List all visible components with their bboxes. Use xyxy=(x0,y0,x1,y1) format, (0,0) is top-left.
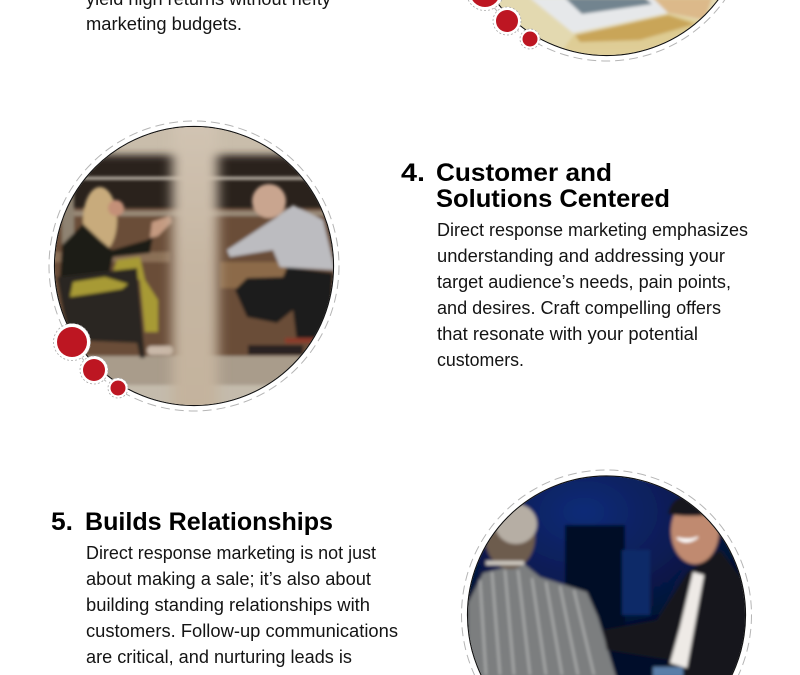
text block: point 5 body: Direct response marketing is not just xyxy=(86,543,376,563)
heading: point 5: 5. xyxy=(51,508,73,536)
heading: point 4: Customer and xyxy=(436,159,612,187)
woman xyxy=(83,187,117,253)
text block: point 4 body xyxy=(437,220,748,370)
photo: laptop on desk xyxy=(494,0,726,62)
text block: point 5 body: are critical, and nurturing leads is xyxy=(86,647,352,667)
text block: point 4 body: target audience’s needs, pain points, xyxy=(437,272,731,292)
text block: point 3 ending: marketing budgets. xyxy=(86,14,242,34)
text block: point 5 body: about making a sale; it’s also about xyxy=(86,569,371,589)
text block: point 3 ending xyxy=(86,0,331,34)
older man xyxy=(468,563,617,675)
man xyxy=(235,267,333,343)
icon: thought bubbles, point 3 xyxy=(466,0,540,49)
heading: point 5: Builds Relationships xyxy=(85,508,333,536)
text block: point 4 body: customers. xyxy=(437,350,524,370)
photo: two men on stage xyxy=(460,470,755,675)
text block: point 5 body xyxy=(86,543,398,667)
heading: point 4 xyxy=(401,159,670,213)
icon: thought bubbles, point 4 xyxy=(54,324,128,398)
younger man xyxy=(603,550,750,675)
photo: two people talking across a glass wall xyxy=(49,110,340,420)
text block: point 5 body: customers. Follow-up communications xyxy=(86,621,398,641)
heading: point 4: Solutions Centered xyxy=(436,185,670,213)
text block: point 4 body: Direct response marketing emphasizes xyxy=(437,220,748,240)
text block: point 4 body: that resonate with your potential xyxy=(437,324,698,344)
text block: point 5 body: building standing relationships with xyxy=(86,595,370,615)
heading: point 4: 4. xyxy=(401,159,425,187)
text block: point 4 body: and desires. Craft compelling offers xyxy=(437,298,721,318)
text block: point 4 body: understanding and addressing your xyxy=(437,246,725,266)
